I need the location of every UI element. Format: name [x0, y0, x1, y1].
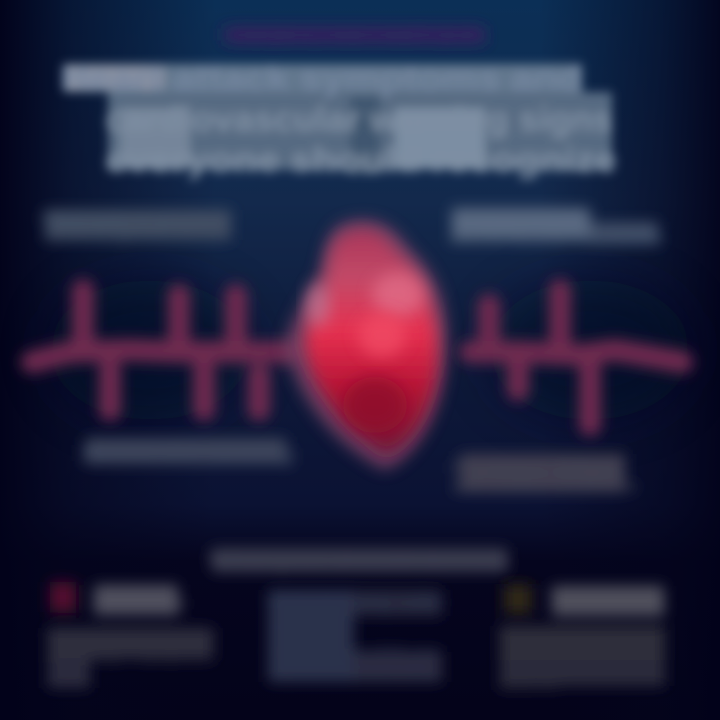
heart core: [358, 313, 406, 357]
column: aspirin: safe and advised by a: [498, 647, 666, 663]
column: aspirin: Take aspirin: [548, 592, 666, 615]
column heading: [268, 590, 354, 682]
heart lobe highlights: [372, 273, 424, 317]
heart glow: [285, 220, 447, 470]
title: Heart attack symptoms and: [60, 59, 582, 98]
label: lower right: Dizziness, fatigue: [452, 458, 622, 477]
column: aspirin: [498, 584, 666, 693]
label: upper right: [449, 208, 662, 247]
column: call: appear: [46, 669, 88, 685]
heart: [285, 220, 447, 470]
column: rest: wait for paramedics: [267, 665, 440, 681]
label: lower right: [452, 454, 637, 495]
column: rest: [267, 590, 443, 682]
title: cardiovascular warning signs: [105, 100, 613, 139]
column: rest: tight clothing while you: [268, 643, 440, 659]
ecg heartbeat line: [32, 290, 682, 425]
section heading: What you should do now: [208, 549, 511, 574]
label: upper left: [42, 208, 232, 243]
icon: yellow square: [504, 584, 532, 614]
column text: [500, 626, 665, 660]
label: upper right: Shortness of breath: [450, 211, 590, 233]
column heading: [552, 586, 664, 616]
label: upper left: spreading to the arm: [42, 226, 222, 243]
label: upper left: Chest pain or pressure: [42, 208, 232, 229]
column: call: right away if symptoms: [46, 649, 214, 665]
column: rest: Rest and stay calm: [268, 591, 443, 613]
title: everyone should recognize: [105, 141, 617, 180]
column text: Sit down and: [268, 619, 353, 635]
label: lower left: Nausea and sweating: [82, 440, 294, 466]
label: upper right: with or without discomfort: [449, 231, 662, 247]
label: lower right: and sudden weakness: [452, 478, 637, 495]
column heading: [94, 585, 178, 615]
icon: red square: [50, 582, 76, 612]
eyebrow label: Emergency heart health guide: [222, 25, 487, 45]
column: call: [46, 582, 216, 688]
column: aspirin: medical care: [498, 677, 558, 693]
heart body: [305, 230, 438, 455]
column: aspirin: Chew one tablet if it is: [498, 625, 663, 641]
title: [60, 59, 617, 180]
column: call: Call now: [92, 590, 185, 615]
column: call: Phone emergency services: [46, 627, 216, 643]
column text: [48, 628, 213, 658]
